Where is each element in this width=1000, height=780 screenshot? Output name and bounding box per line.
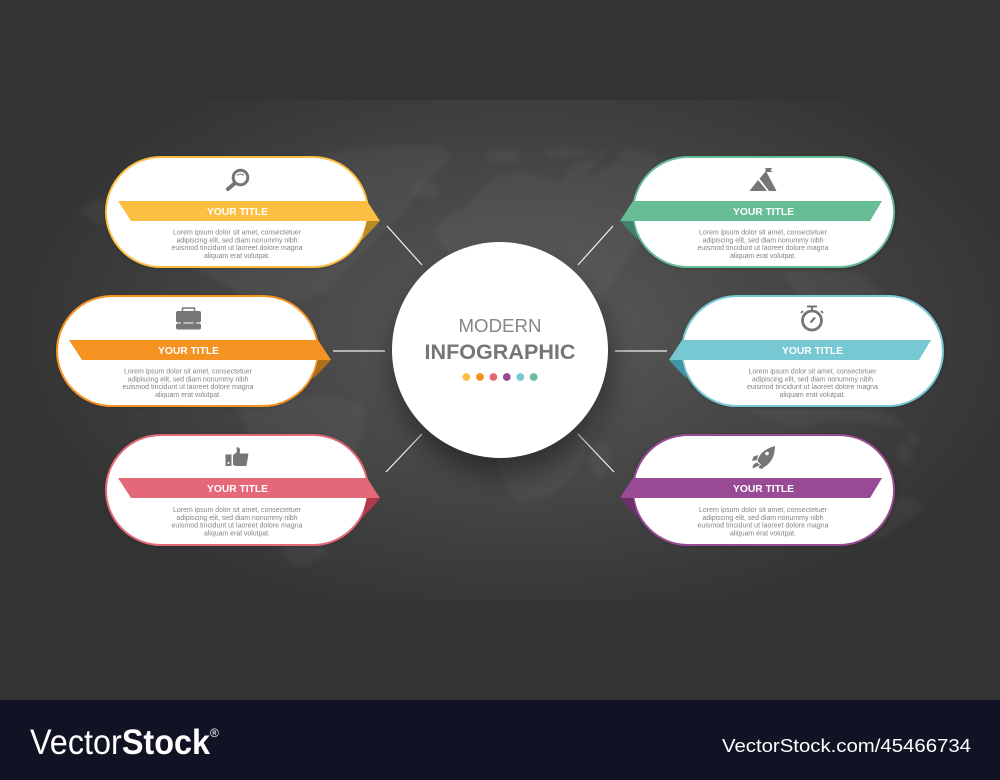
body text: adipiscing elit, sed diam nonummy nibh bbox=[752, 376, 873, 384]
main background panel bbox=[0, 100, 1000, 600]
body text: euismod tincidunt ut laoreet dolore magna bbox=[747, 384, 878, 391]
ribbon fold bbox=[620, 221, 638, 240]
title: YOUR TITLE bbox=[207, 206, 268, 218]
icon: stopwatch bbox=[801, 306, 823, 330]
body text: euismod tincidunt ut laoreet dolore magna bbox=[698, 522, 829, 530]
central circle bbox=[392, 242, 608, 458]
body text: aliquam erat volutpat. bbox=[155, 392, 221, 399]
heading: modern: MODERN bbox=[458, 315, 542, 336]
panel: green card bbox=[620, 157, 896, 268]
body text: Lorem ipsum dolor sit amet, consectetuer bbox=[699, 230, 828, 236]
panel: pink card bbox=[105, 435, 380, 546]
icon: rocket bbox=[752, 446, 775, 469]
icon: briefcase bbox=[176, 308, 201, 330]
world map silhouette bbox=[80, 145, 921, 566]
icon: magnifying glass bbox=[228, 170, 248, 189]
title: YOUR TITLE bbox=[733, 206, 794, 218]
body text bbox=[172, 230, 303, 260]
connector lines bbox=[333, 226, 667, 472]
body text: euismod tincidunt ut laoreet dolore magna bbox=[172, 522, 303, 530]
body text: Lorem ipsum dolor sit amet, consectetuer bbox=[699, 507, 828, 514]
ribbon bbox=[620, 201, 882, 221]
ribbon bbox=[118, 478, 380, 498]
icon: mountain flag bbox=[750, 168, 776, 191]
panel: orange card bbox=[56, 296, 331, 407]
body text: euismod tincidunt ut laoreet dolore magna bbox=[122, 384, 254, 391]
body text: Lorem ipsum dolor sit amet, consectetuer bbox=[748, 368, 877, 376]
ribbon fold bbox=[362, 498, 380, 518]
footer bar bbox=[0, 700, 1000, 780]
title: YOUR TITLE bbox=[782, 345, 843, 357]
title: YOUR TITLE bbox=[733, 483, 794, 495]
bottom background band bbox=[0, 600, 1000, 700]
footer logo: VectorStock bbox=[30, 723, 210, 762]
ribbon fold bbox=[620, 498, 638, 518]
body text bbox=[698, 230, 829, 260]
icon: thumbs up bbox=[226, 447, 248, 466]
body text: aliquam erat volutpat. bbox=[730, 530, 796, 538]
central circle shadow bbox=[395, 258, 611, 474]
heading: infographic: INFOGRAPHIC bbox=[424, 341, 576, 364]
ribbon bbox=[669, 340, 931, 360]
title: YOUR TITLE bbox=[207, 483, 268, 495]
panel: teal card bbox=[669, 296, 945, 407]
body text bbox=[747, 368, 878, 399]
ribbon fold bbox=[313, 360, 331, 379]
ribbon bbox=[620, 478, 882, 498]
body text: aliquam erat volutpat. bbox=[204, 253, 270, 260]
ribbon fold bbox=[669, 360, 687, 379]
top background band bbox=[0, 0, 1000, 100]
body text: aliquam erat volutpat. bbox=[780, 392, 846, 399]
ribbon bbox=[69, 340, 331, 360]
body text: Lorem ipsum dolor sit amet, consectetuer bbox=[173, 507, 302, 514]
body text bbox=[698, 507, 829, 538]
body text: adipiscing elit, sed diam nonummy nibh bbox=[176, 238, 298, 244]
body text: euismod tincidunt ut laoreet dolore magna bbox=[172, 245, 303, 252]
body text: Lorem ipsum dolor sit amet, consectetuer bbox=[124, 368, 253, 376]
body text: adipiscing elit, sed diam nonummy nibh bbox=[702, 515, 824, 522]
body text: aliquam erat volutpat. bbox=[204, 530, 270, 538]
body text: adipiscing elit, sed diam nonummy nibh bbox=[176, 515, 298, 522]
colour dots bbox=[462, 373, 538, 381]
title: YOUR TITLE bbox=[158, 345, 219, 357]
registered mark: ® bbox=[210, 726, 219, 740]
ribbon fold bbox=[362, 221, 380, 240]
panel: yellow card bbox=[105, 157, 380, 268]
body text: euismod tincidunt ut laoreet dolore magna bbox=[698, 245, 829, 252]
body text bbox=[122, 368, 254, 399]
body text: adipiscing elit, sed diam nonummy nibh bbox=[128, 376, 249, 384]
body text: Lorem ipsum dolor sit amet, consectetuer bbox=[173, 230, 302, 236]
footer id: VectorStock.com/45466734 bbox=[722, 735, 971, 756]
body text bbox=[172, 507, 303, 538]
panel: purple card bbox=[620, 435, 896, 546]
ribbon bbox=[118, 201, 380, 221]
body text: adipiscing elit, sed diam nonummy nibh bbox=[702, 238, 824, 244]
body text: aliquam erat volutpat. bbox=[730, 253, 796, 260]
